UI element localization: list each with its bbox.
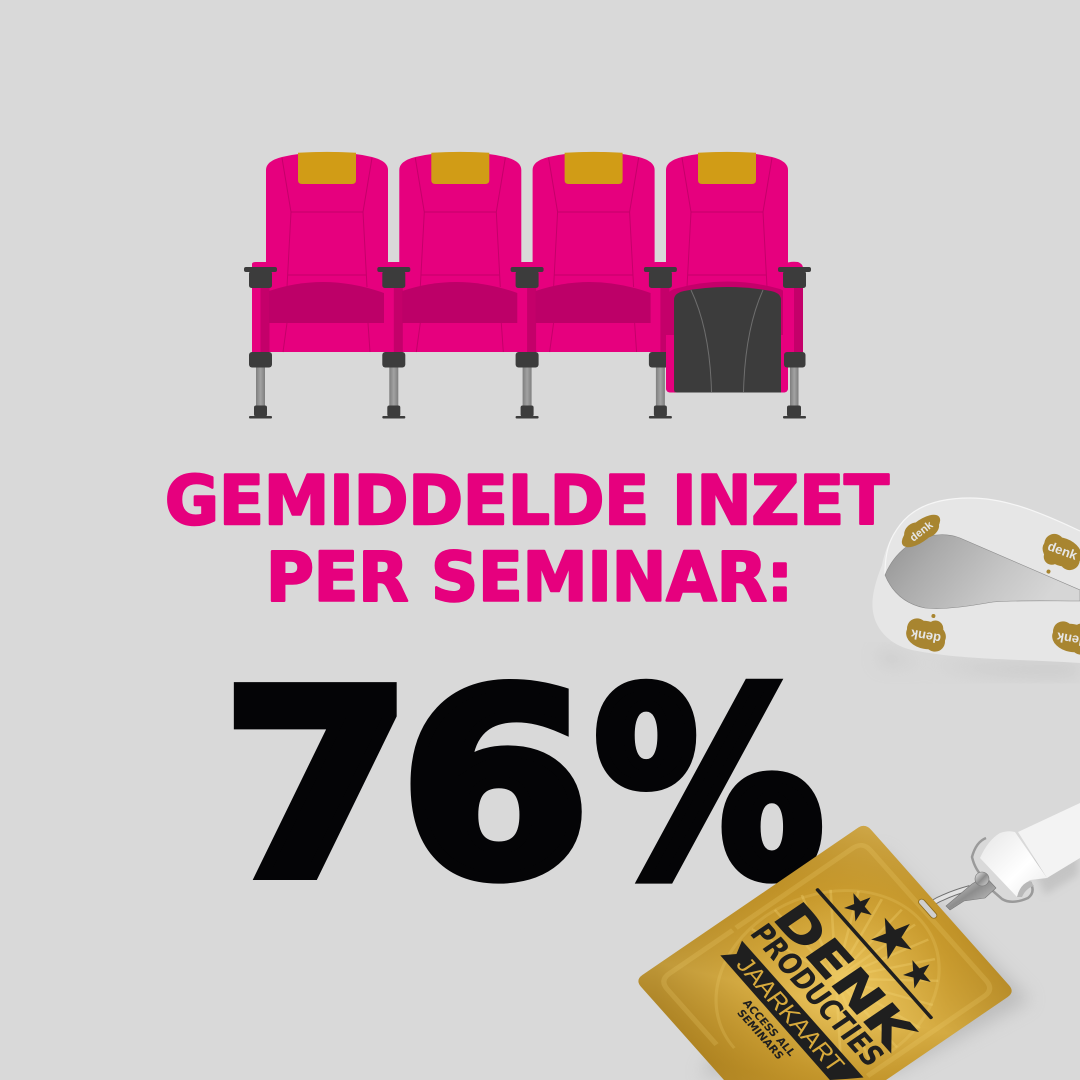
seat 2 <box>377 152 535 418</box>
seat 1 <box>244 152 402 418</box>
heading <box>165 462 890 618</box>
d-ring <box>972 838 1033 902</box>
badge hole <box>917 898 938 919</box>
big percentage: 6 <box>400 638 590 935</box>
lanyard logo top right <box>1035 531 1080 582</box>
lanyard logo top right: denk <box>1046 538 1080 563</box>
badge sunburst <box>659 841 994 1079</box>
lanyard logo top left <box>895 507 946 554</box>
big percentage <box>222 638 824 935</box>
lanyard strap and clip <box>921 803 1080 918</box>
heading: PER SEMINAR: <box>266 538 793 618</box>
badge tagline: ACCESS ALL <box>740 998 798 1059</box>
badge ribbon label: JAARKAART <box>730 953 850 1077</box>
swivel hook <box>921 888 970 918</box>
strap <box>1018 803 1080 878</box>
gold badge <box>638 826 1012 1080</box>
heading: GEMIDDELDE INZET <box>165 462 890 541</box>
lanyard logo top left: denk <box>908 519 936 544</box>
seat 4 folded up <box>644 152 811 418</box>
lanyard logo bottom right <box>1050 619 1080 656</box>
lanyard loop <box>872 498 1080 676</box>
badge rule <box>815 888 933 1020</box>
badge stars <box>841 886 939 993</box>
strap fold <box>980 831 1047 897</box>
badge wordmark: DENK <box>762 894 926 1059</box>
lanyard logo bottom left <box>904 610 950 653</box>
seat 3 <box>511 152 669 418</box>
badge tagline: SEMINARS <box>734 1008 786 1062</box>
badge ribbon <box>720 941 864 1080</box>
big percentage: % <box>594 638 824 935</box>
lanyard logo bottom left: denk <box>909 626 942 646</box>
big percentage: 7 <box>222 638 412 935</box>
badge shadow <box>700 850 1030 1075</box>
seats row illustration <box>244 152 811 418</box>
